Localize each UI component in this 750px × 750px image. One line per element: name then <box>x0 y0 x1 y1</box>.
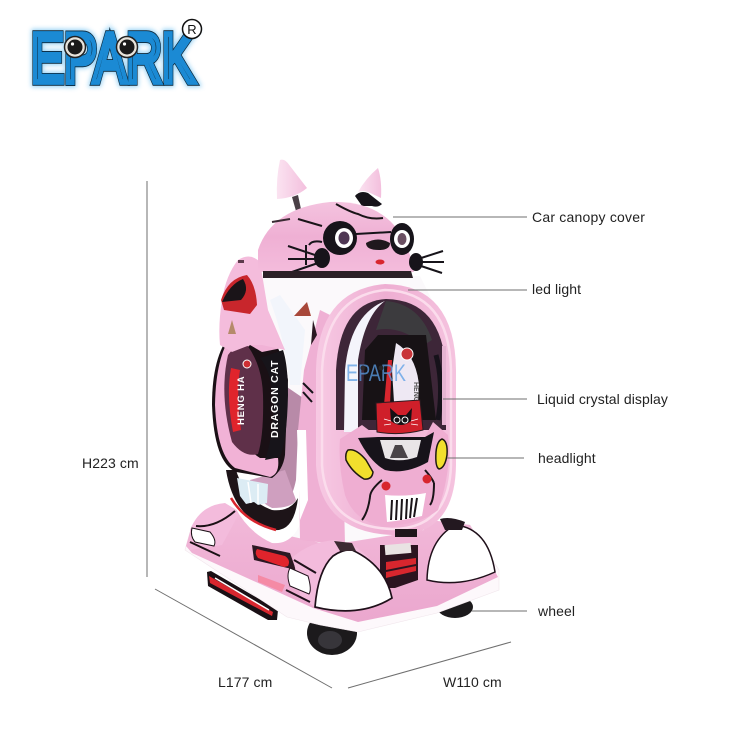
callout: led light: led light <box>532 281 581 297</box>
front window <box>336 299 446 432</box>
callout: car canopy cover: Car canopy cover <box>532 209 645 225</box>
left front fender <box>286 540 392 611</box>
logo: EPARK: EPARK <box>31 19 195 97</box>
side ring text: HENG HA: HENG HA <box>236 376 247 425</box>
teeth <box>237 478 268 505</box>
dashboard panel <box>340 422 449 537</box>
seat <box>392 343 419 402</box>
logo: EPARK: EPARK <box>31 19 195 97</box>
width label: W110 cm <box>443 674 502 690</box>
face: nose and mouth <box>366 240 390 264</box>
whiskers right <box>410 251 444 273</box>
base platform <box>185 510 499 632</box>
right front fender <box>427 518 495 583</box>
back column stripe <box>380 545 418 588</box>
rear bumper <box>207 571 278 620</box>
pink column <box>297 310 345 545</box>
watermark: EPARK <box>346 360 406 387</box>
dimension line: length <box>155 589 332 688</box>
height label: H223 cm <box>82 455 139 471</box>
callout: headlight: headlight <box>538 450 596 466</box>
whiskers left <box>288 241 329 273</box>
length label: L177 cm <box>218 674 272 690</box>
dimension line: height <box>146 181 148 577</box>
head collar <box>263 271 413 278</box>
left rear pod <box>190 503 240 556</box>
rear capsule arc <box>222 430 308 543</box>
warning triangle <box>294 302 311 316</box>
shoulder arm <box>219 252 285 352</box>
face: eyes <box>323 221 414 255</box>
dimension line: width <box>348 642 511 688</box>
callout: wheel: wheel <box>537 603 575 619</box>
side ring text: DRAGON CAT: DRAGON CAT <box>269 360 281 438</box>
seat text: HENG <box>412 382 419 403</box>
logo: EPARK: R <box>187 22 197 37</box>
callout: liquid crystal display: Liquid crystal display <box>537 391 668 407</box>
body shade <box>278 385 306 500</box>
body blue-white shade <box>270 295 305 385</box>
wheels <box>307 596 473 655</box>
head dome <box>258 202 414 272</box>
machine illustration <box>185 160 499 655</box>
ear: right cone <box>355 168 382 207</box>
side ring <box>212 325 288 478</box>
callout: wheel <box>472 603 575 619</box>
warning sticker <box>385 543 411 555</box>
white body <box>262 276 432 545</box>
column red lights <box>386 558 416 578</box>
ear: left cone <box>277 160 307 211</box>
headlights <box>346 439 447 479</box>
front capsule <box>316 284 456 535</box>
red rear light <box>252 545 296 592</box>
red display <box>376 400 423 434</box>
logo: EPARK: EPARK <box>31 19 195 97</box>
